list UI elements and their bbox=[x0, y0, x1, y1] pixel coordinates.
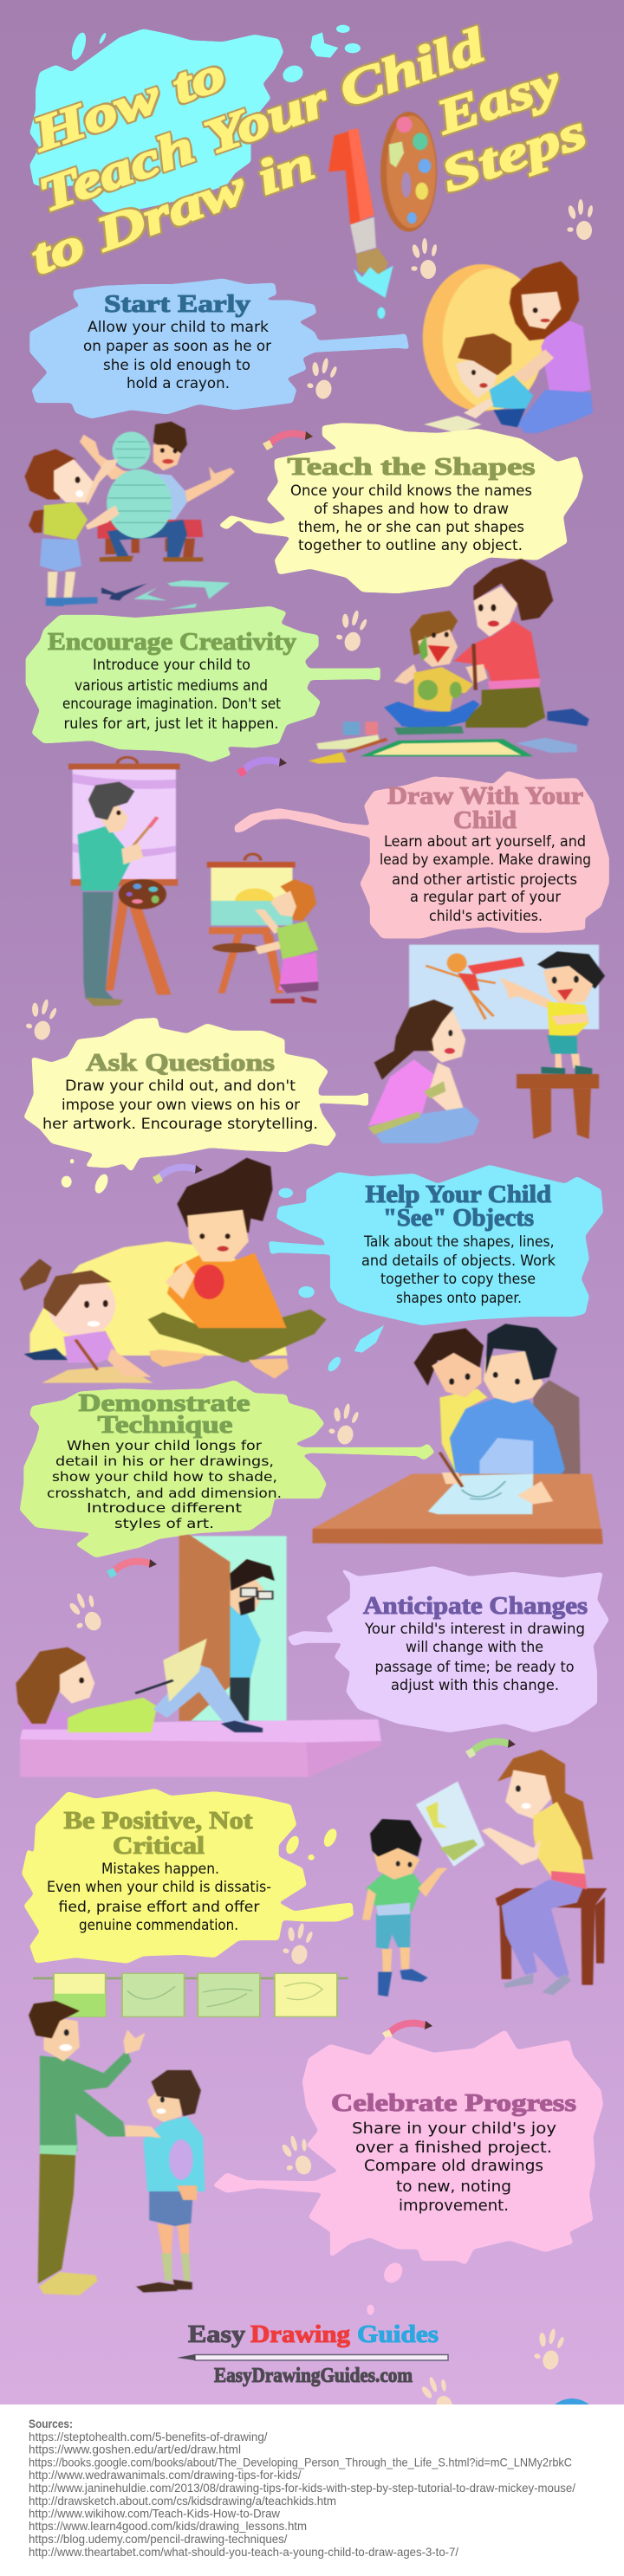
website: EasyDrawingGuides.com bbox=[214, 2365, 413, 2387]
panel: help your child see objects: shapes onto paper. bbox=[396, 1290, 522, 1307]
panel: help your child see objects: Talk about the shapes, lines, bbox=[363, 1233, 555, 1251]
palette zero bbox=[380, 112, 437, 232]
logo: Easy Drawing Guides bbox=[177, 2320, 448, 2387]
face details bbox=[471, 307, 550, 388]
sources list bbox=[29, 2417, 575, 2559]
panel: celebrate progress: over a finished project. bbox=[355, 2139, 552, 2157]
mother bbox=[368, 1000, 479, 1143]
panel: draw with your child: and other artistic projects bbox=[392, 871, 577, 889]
panel: help your child see objects: "See" Objects bbox=[383, 1204, 534, 1232]
panel: demonstrate technique bbox=[20, 1380, 434, 1557]
panel: teach the shapes bbox=[219, 423, 583, 593]
title text: How to bbox=[25, 47, 232, 163]
illustration: mother and boy drawing bbox=[423, 262, 593, 433]
panel: ask questions: impose your own views on his or bbox=[62, 1097, 300, 1114]
white sources band bbox=[0, 2404, 624, 2576]
panel: teach the shapes: of shapes and how to draw bbox=[314, 501, 509, 518]
icon: pink crayon with cream eraser bbox=[382, 2021, 432, 2040]
illustration: father and boy at desk bbox=[312, 1324, 603, 1544]
panel: celebrate progress: Celebrate Progress bbox=[331, 2089, 576, 2117]
panel: anticipate changes: Anticipate Changes bbox=[363, 1592, 588, 1620]
illustration: father praising son bbox=[29, 2001, 205, 2295]
sources list: http://www.wikihow.com/Teach-Kids-How-to-Draw bbox=[29, 2507, 281, 2521]
drawing three bbox=[198, 1973, 260, 2016]
panel: encourage creativity: encourage imagination. Don't set bbox=[62, 696, 281, 713]
panel: help your child see objects: and details of objects. Work bbox=[361, 1252, 556, 1270]
panel: be positive, not critical bbox=[22, 1789, 354, 1964]
title text: Easy bbox=[430, 55, 568, 146]
panel: be positive, not critical: Even when your child is dissatis- bbox=[47, 1879, 271, 1896]
girl bbox=[255, 879, 318, 1003]
father bbox=[29, 2001, 146, 2295]
drawing held up bbox=[416, 1782, 484, 1867]
panel: celebrate progress: to new, noting bbox=[396, 2178, 511, 2196]
child bbox=[20, 1259, 151, 1377]
panel: start early: on paper as soon as he or bbox=[83, 338, 271, 355]
cropped blue shape at band edge bbox=[555, 2398, 589, 2404]
sources list: https://books.google.com/books/about/The_Developing_Person_Through_the_Life_S.html?id=mC_LNMy2rbkC bbox=[29, 2455, 572, 2469]
panel: draw with your child: Child bbox=[453, 806, 517, 834]
mother bbox=[482, 1750, 593, 1995]
panel: draw with your child: Draw With Your bbox=[387, 782, 583, 810]
panel: anticipate changes: adjust with this change. bbox=[391, 1677, 559, 1694]
drawing one bbox=[54, 1973, 106, 2016]
face details bbox=[449, 1372, 520, 1385]
panel: ask questions: her artwork. Encourage storytelling. bbox=[42, 1116, 318, 1133]
panel: demonstrate technique: Technique bbox=[97, 1411, 233, 1439]
panel: encourage creativity bbox=[26, 606, 380, 762]
girl's easel bbox=[207, 854, 296, 994]
panel: encourage creativity: various artistic mediums and bbox=[75, 677, 268, 695]
panel: demonstrate technique: Introduce different bbox=[87, 1500, 242, 1516]
sources list: https://steptohealth.com/5-benefits-of-drawing/ bbox=[29, 2430, 268, 2443]
logo wordmark: Easy bbox=[188, 2320, 246, 2348]
logo wordmark: Guides bbox=[357, 2320, 439, 2348]
logo wordmark bbox=[188, 2320, 439, 2348]
man's easel bbox=[68, 757, 180, 994]
panel: celebrate progress: Compare old drawings bbox=[364, 2157, 543, 2175]
sources list: https://blog.udemy.com/pencil-drawing-techniques/ bbox=[29, 2532, 288, 2546]
number one brush bbox=[328, 128, 393, 319]
illustration: girl and father with cut-out shape bbox=[24, 422, 235, 609]
panel: start early bbox=[29, 279, 409, 418]
panel: draw with your child: a regular part of your bbox=[410, 889, 561, 906]
panel: demonstrate technique: detail in his or her drawings, bbox=[55, 1453, 274, 1469]
sources list: http://www.theartabet.com/what-should-you-teach-a-young-child-to-draw-ages-3-to-7/ bbox=[29, 2545, 458, 2559]
sources list: https://www.goshen.edu/art/ed/draw.html bbox=[29, 2443, 241, 2456]
panel: be positive, not critical: Mistakes happen. bbox=[101, 1861, 219, 1878]
clothesline with children's drawings bbox=[33, 1973, 348, 2016]
sources list: https://www.learn4good.com/kids/drawing_lessons.htm bbox=[29, 2519, 307, 2533]
illustration: girl on couch and man at door bbox=[16, 1535, 381, 1777]
illustration: mother and painted boy bbox=[309, 559, 589, 764]
panel: be positive, not critical: Critical bbox=[113, 1832, 205, 1860]
man bbox=[78, 782, 166, 1006]
panel: anticipate changes: will change with the bbox=[406, 1639, 543, 1656]
panel: celebrate progress: improvement. bbox=[399, 2197, 509, 2215]
sources list: http://www.wedrawanimals.com/drawing-tips-for-kids/ bbox=[29, 2468, 302, 2482]
panel: teach the shapes: Once your child knows the names bbox=[290, 482, 532, 500]
logo wordmark: Drawing bbox=[250, 2320, 351, 2348]
icon: lavender crayon bbox=[153, 1165, 203, 1184]
panel: encourage creativity: Encourage Creativity bbox=[48, 628, 297, 656]
panel: demonstrate technique: Demonstrate bbox=[78, 1389, 250, 1417]
panel: anticipate changes: passage of time; be ready to bbox=[374, 1659, 574, 1676]
panel: help your child see objects: together to copy these bbox=[380, 1271, 536, 1288]
face details bbox=[445, 976, 579, 1054]
panel: demonstrate technique: crosshatch, and add dimension. bbox=[47, 1485, 282, 1501]
panel: start early: Start Early bbox=[104, 290, 251, 318]
panel: be positive, not critical: fied, praise effort and offer bbox=[59, 1899, 260, 1916]
illustration: boy showing drawing to mother bbox=[362, 1750, 607, 1997]
panel: be positive, not critical: Be Positive, Not bbox=[64, 1807, 253, 1835]
sources list: http://www.janinehuldie.com/2013/08/drawing-tips-for-kids-with-step-by-step-tutorial-to-draw-mickey-mouse/ bbox=[29, 2481, 575, 2495]
panel: teach the shapes: them, he or she can put shapes bbox=[298, 519, 524, 536]
panel: draw with your child: lead by example. Make drawing bbox=[380, 851, 591, 869]
panel: ask questions: Draw your child out, and don't bbox=[65, 1078, 296, 1095]
panel: ask questions: Ask Questions bbox=[86, 1049, 275, 1077]
sources list: http://drawsketch.about.com/cs/kidsdrawing/a/teachkids.htm bbox=[29, 2494, 336, 2508]
panel: encourage creativity: Introduce your child to bbox=[93, 657, 250, 674]
face details bbox=[200, 1233, 230, 1252]
icon: green crayon bbox=[465, 1739, 516, 1758]
panel: celebrate progress: Share in your child's joy bbox=[352, 2120, 556, 2138]
decorative paw prints bbox=[23, 199, 594, 2420]
panel: draw with your child bbox=[235, 771, 609, 938]
boy bbox=[362, 1819, 448, 1997]
panel: demonstrate technique: show your child how to shade, bbox=[52, 1469, 277, 1485]
sources list: Sources: bbox=[29, 2417, 73, 2430]
son bbox=[136, 2070, 205, 2293]
stool bbox=[496, 1888, 607, 1985]
title paint splash bbox=[29, 25, 361, 212]
panel: anticipate changes: Your child's interest in drawing bbox=[364, 1621, 585, 1638]
illustration: man and girl painting at easels bbox=[68, 757, 318, 1006]
illustration: boy presenting drawing to mother bbox=[368, 945, 605, 1143]
face details bbox=[75, 448, 177, 497]
panel: encourage creativity: rules for art, just let it happen. bbox=[64, 715, 279, 733]
title text: Teach Your Child bbox=[32, 18, 492, 223]
title text: Steps bbox=[434, 105, 593, 203]
paintbrush number one and palette zero bbox=[328, 112, 437, 319]
panel: start early: hold a crayon. bbox=[127, 375, 230, 392]
panel: anticipate changes bbox=[288, 1566, 609, 1732]
drawing two bbox=[122, 1973, 185, 2016]
title text: to Draw in bbox=[24, 136, 322, 285]
logo pencil bbox=[177, 2354, 448, 2360]
panel: help your child see objects: Help Your Child bbox=[366, 1181, 551, 1208]
icon: purple crayon bbox=[237, 758, 287, 777]
drawing four bbox=[275, 1973, 337, 2016]
panel: draw with your child: Learn about art yourself, and bbox=[384, 833, 586, 851]
panel: start early: she is old enough to bbox=[103, 357, 250, 374]
panel: help your child see objects bbox=[269, 1165, 603, 1373]
illustration: mother with apple and child drawing bbox=[20, 1158, 327, 1383]
panel: demonstrate technique: When your child longs for bbox=[67, 1438, 263, 1453]
panel: be positive, not critical: genuine commendation. bbox=[79, 1917, 238, 1934]
panel: teach the shapes: together to outline any object. bbox=[298, 537, 523, 554]
icon: pink crayon with blue eraser bbox=[107, 1559, 157, 1578]
title text bbox=[24, 18, 593, 285]
panel: start early: Allow your child to mark bbox=[88, 319, 269, 336]
panel: ask questions bbox=[24, 1018, 368, 1194]
panel: teach the shapes: Teach the Shapes bbox=[288, 453, 536, 481]
panel: celebrate progress bbox=[213, 2029, 603, 2315]
panel: draw with your child: child's activities. bbox=[429, 908, 543, 925]
stool bbox=[517, 1074, 599, 1139]
child's stick figure drawing bbox=[426, 954, 524, 1019]
icon: pink crayon bbox=[263, 431, 313, 450]
face details bbox=[432, 605, 499, 638]
panel: demonstrate technique: styles of art. bbox=[114, 1516, 214, 1531]
